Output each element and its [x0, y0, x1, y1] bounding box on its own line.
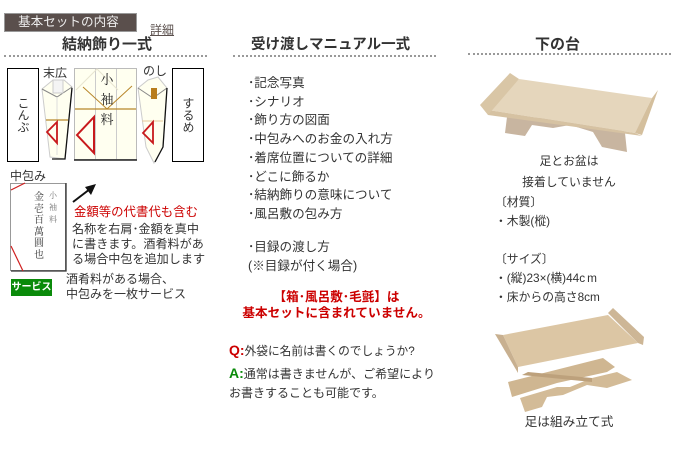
caption: not glued: 足とお盆は — [540, 154, 598, 168]
list: manual contents: ･中包みへのお金の入れ方 — [248, 132, 393, 146]
label: inner envelope calligraphy: 小 — [49, 190, 57, 201]
label: nakatsutsumi: 中包み — [10, 169, 46, 183]
list: manual contents: ･飾り方の図面 — [248, 113, 330, 127]
caption: not glued — [522, 154, 616, 189]
heading: yuino decoration set: 結納飾り一式 — [62, 36, 152, 53]
text: size: 〔サイズ〕 — [495, 252, 554, 266]
text: mokuroku — [248, 240, 357, 273]
label: inner envelope calligraphy — [34, 190, 57, 260]
faq: answer: A:通常は書きませんが、ご希望により — [229, 365, 435, 381]
label: inner envelope calligraphy: 壱 — [34, 200, 44, 214]
text: service description: 中包みを一枚サービス — [66, 286, 186, 300]
heading: handover manual set: 受け渡しマニュアル一式 — [251, 37, 410, 53]
list: manual contents: ･どこに飾るか — [248, 170, 329, 184]
callout: not included: 基本セットに含まれていません。 — [242, 306, 431, 320]
list: manual contents: ･風呂敷の包み方 — [248, 207, 342, 221]
link: details: 詳細 — [150, 23, 174, 37]
label: inner envelope calligraphy: 百 — [34, 211, 44, 226]
caption: assembled type: 足は組み立て式 — [525, 415, 613, 429]
note: includes writing fee: 金額等の代書代も含む — [74, 205, 198, 219]
faq: answer: お書きすることも可能です。 — [229, 386, 384, 400]
badge: service: サービス — [12, 282, 52, 293]
caption: not glued: 接着していません — [522, 175, 616, 189]
list: manual contents: ･シナリオ — [248, 95, 305, 109]
text: inner envelope description: 名称を右肩･金額を真中 — [72, 222, 199, 236]
text: size: ・(縦)23×(横)44cm — [495, 271, 599, 285]
label: envelope calligraphy — [100, 69, 114, 128]
text: size: ・床からの高さ8cm — [495, 290, 600, 304]
panel: surume box — [172, 68, 204, 162]
text: inner envelope description: る場合中包を追加します — [72, 252, 205, 266]
text: size — [495, 252, 600, 304]
label: suehiro: 末広 — [43, 66, 67, 80]
label: inner envelope calligraphy: 萬 — [34, 222, 44, 238]
label: noshi: のし — [143, 64, 167, 78]
list: manual contents — [248, 76, 393, 221]
text: mokuroku: ･目録の渡し方 — [248, 240, 330, 254]
badge: basic set contents: 基本セットの内容 — [18, 15, 119, 29]
callout: not included: 【箱･風呂敷･毛氈】は — [274, 290, 399, 304]
text: mokuroku: (※目録が付く場合) — [248, 259, 357, 273]
text: material: 〔材質〕 — [495, 195, 542, 209]
label: inner envelope calligraphy: 袖 — [49, 202, 57, 213]
label: envelope calligraphy: 小 — [100, 69, 114, 88]
faq: answer — [229, 365, 435, 400]
text: material: ・木製(樅) — [495, 214, 550, 228]
text: inner envelope description — [72, 222, 205, 266]
text: inner envelope description: に書きます。酒肴料があ — [72, 237, 204, 251]
text: service description: 酒肴料がある場合、 — [66, 272, 174, 286]
text: material — [495, 195, 550, 228]
text: service description — [66, 272, 186, 300]
faq: question: Q:外袋に名前は書くのでしょうか? — [229, 342, 415, 358]
label: inner envelope calligraphy: 也 — [34, 246, 44, 260]
label: envelope calligraphy: 料 — [100, 109, 114, 128]
panel: kombu box: こんぶ — [16, 97, 30, 133]
badge: service — [11, 279, 52, 296]
panel: surume box: するめ — [181, 97, 195, 133]
heading: lower stand: 下の台 — [535, 36, 580, 53]
badge: basic set contents — [4, 13, 137, 32]
callout: not included — [242, 290, 431, 320]
label: inner envelope calligraphy: 料 — [49, 214, 57, 225]
label: envelope calligraphy: 袖 — [100, 89, 114, 108]
label: inner envelope calligraphy: 圓 — [34, 234, 44, 249]
list: manual contents: ･記念写真 — [248, 76, 305, 90]
list: manual contents: ･結納飾りの意味について — [248, 188, 392, 202]
panel: kombu box — [7, 68, 39, 162]
list: manual contents: ･着席位置についての詳細 — [248, 151, 392, 165]
